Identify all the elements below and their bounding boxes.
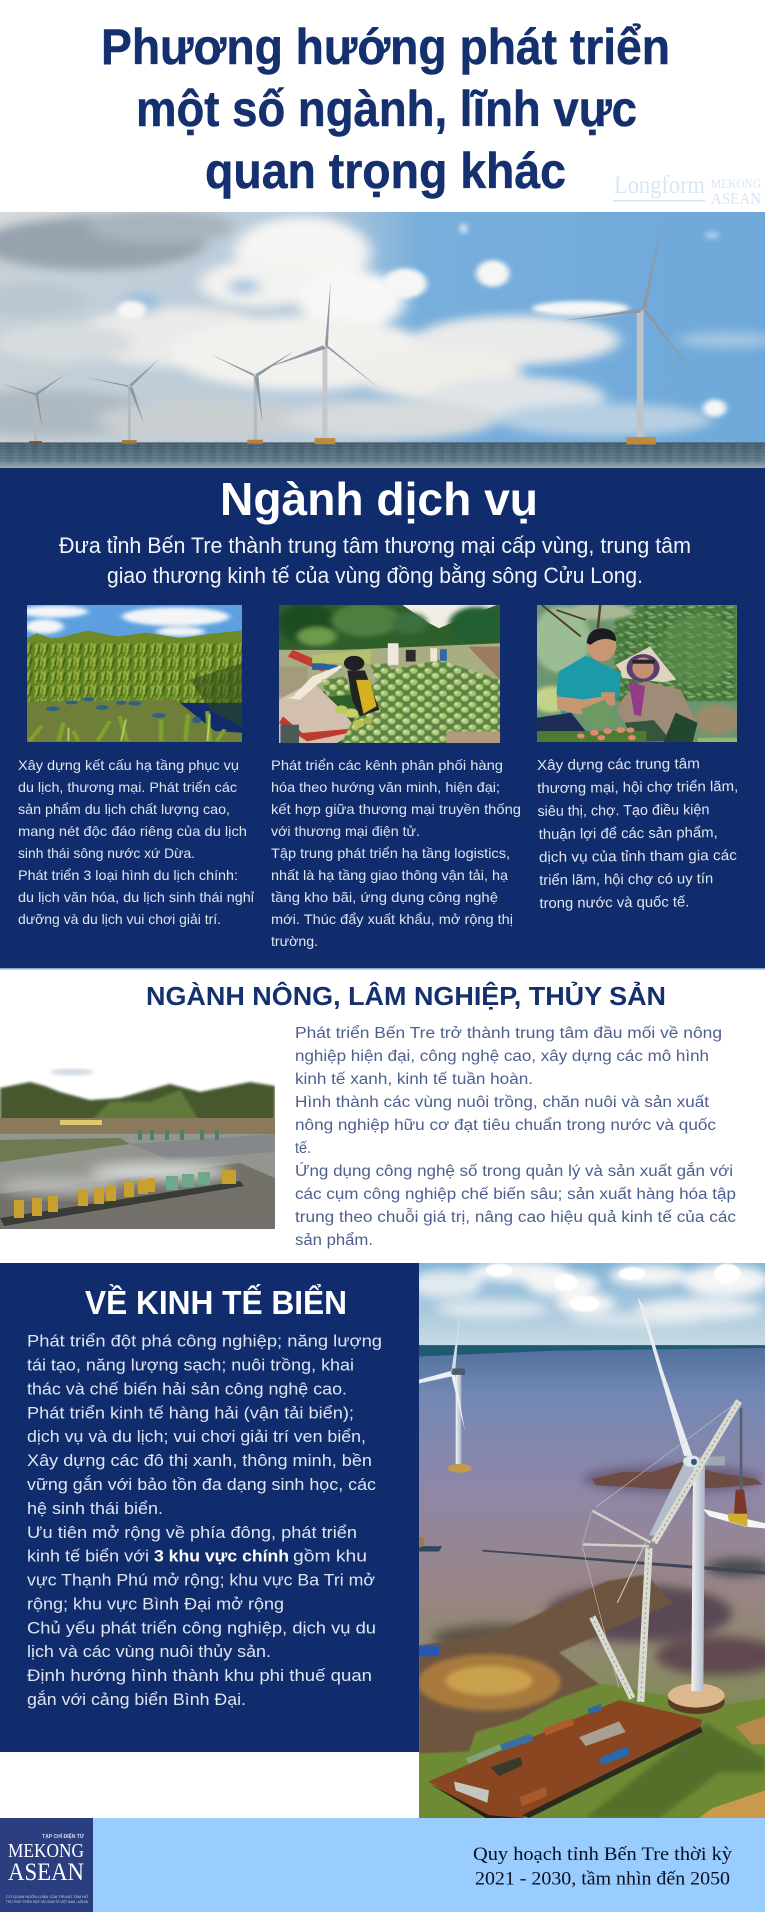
title: quan trọng khác xyxy=(205,143,566,199)
title xyxy=(101,19,670,199)
text: distribution and logistics column xyxy=(271,757,521,949)
text: agriculture description: trung theo chuỗi giá trị, nâng cao hiệu quả kinh tế của các xyxy=(295,1209,736,1226)
text: tourism column: du lịch văn hóa, du lịch sinh thái nghỉ xyxy=(18,889,255,905)
panel: marine economy xyxy=(0,1263,419,1752)
text: trade centres column: Xây dựng các trung tâm xyxy=(537,756,700,774)
text: trade centres column: siêu thị, chợ. Tạo điều kiện xyxy=(537,802,710,820)
photo: wind turbine construction with crane barge xyxy=(419,1263,765,1818)
text: marine economy description: Xây dựng các đô thị xanh, thông minh, bền xyxy=(27,1451,372,1470)
photo: offshore wind turbines xyxy=(0,212,765,468)
subtitle: giao thương kinh tế của vùng đồng bằng sông Cửu Long. xyxy=(107,563,643,588)
text: trade centres column: thương mại, hội chợ triển lãm, xyxy=(537,779,738,797)
text: distribution and logistics column: tầng kho bãi, ứng dụng công nghệ xyxy=(271,889,498,905)
text: marine economy description: thác và chế biến hải sản công nghệ cao. xyxy=(27,1380,347,1398)
text: trade centres column: triển lãm, hội chợ có uy tín xyxy=(539,871,713,889)
text: marine economy description: vực Thạnh Phú mở rộng; khu vực Ba Tri mở xyxy=(27,1570,375,1590)
text: agriculture description: tế. xyxy=(295,1140,311,1157)
text: marine economy description: dịch vụ và du lịch; vui chơi giải trí ven biển, xyxy=(27,1427,366,1446)
text: marine economy description: gắn với cảng biển Bình Đại. xyxy=(27,1690,246,1709)
logo: Mekong ASEAN: TẠP CHÍ ĐIỆN TỬ xyxy=(42,1832,85,1840)
text: trade centres column: thuận lợi để các sản phẩm, xyxy=(539,825,718,843)
watermark: Longform Mekong ASEAN: Longform xyxy=(614,172,705,199)
text: agriculture description xyxy=(295,1025,736,1249)
text: marine economy description: Chủ yếu phát triển công nghiệp, dịch vụ du xyxy=(27,1618,376,1638)
text: marine economy description: 3 khu vực chính xyxy=(154,1546,289,1566)
text: marine economy description: kinh tế biển với xyxy=(27,1546,149,1566)
barge xyxy=(428,1700,702,1818)
text: marine economy description: tái tạo, năng lượng sạch; nuôi trồng, khai xyxy=(27,1356,354,1374)
text: distribution and logistics column: Tập trung phát triển hạ tầng logistics, xyxy=(271,845,510,861)
text: agriculture description: Hình thành các vùng nuôi trồng, chăn nuôi và sản xuất xyxy=(295,1094,710,1111)
text: tourism column: mang nét độc đáo riêng của du lịch xyxy=(18,823,247,839)
large turbine xyxy=(691,1461,705,1691)
footer bar xyxy=(0,1818,765,1912)
footer caption: Quy hoạch tỉnh Bến Tre thời kỳ xyxy=(473,1844,733,1865)
text: tourism column: Xây dựng kết cấu hạ tầng phục vụ xyxy=(18,757,239,773)
watermark: Longform Mekong ASEAN xyxy=(613,172,761,208)
text: trade centres column xyxy=(537,756,739,912)
turbines xyxy=(0,225,700,443)
text: agriculture description: Phát triển Bến Tre trở thành trung tâm đầu mối về nông xyxy=(295,1025,722,1042)
footer caption: 2021 - 2030, tầm nhìn đến 2050 xyxy=(475,1868,730,1890)
logo: Mekong ASEAN: CƠ QUAN NGÔN LUẬN CỦA TRUNG TÂM HỖ xyxy=(6,1894,88,1899)
text: agriculture description: kinh tế xanh, kinh tế tuần hoàn. xyxy=(295,1071,533,1088)
logo: Mekong ASEAN: MEKONG xyxy=(8,1840,84,1862)
footer caption xyxy=(473,1844,733,1890)
text: distribution and logistics column: với thương mại điện tử. xyxy=(271,823,420,839)
text: distribution and logistics column: nhất là hạ tầng giao thông vận tải, hạ xyxy=(271,867,508,883)
divider line under services panel xyxy=(0,968,765,970)
text: tourism column: sinh thái sông nước xứ Dừa. xyxy=(18,845,195,861)
logo: Mekong ASEAN xyxy=(0,1818,93,1912)
foundation xyxy=(668,1690,725,1714)
text: agriculture description: nông nghiệp hữu cơ đạt tiêu chuẩn trong nước và quốc xyxy=(295,1117,716,1134)
photo: farmers with fruit xyxy=(537,605,737,742)
text: agriculture description: nghiệp hiện đại, công nghệ cao, xây dựng các mô hình xyxy=(295,1048,709,1065)
subtitle xyxy=(59,533,691,588)
text: marine economy description xyxy=(27,1332,382,1709)
text: marine economy description: vững gắn với bảo tồn đa dạng sinh học, các xyxy=(27,1475,377,1494)
heading: Ngành dịch vụ: Ngành dịch vụ xyxy=(220,473,538,525)
text: distribution and logistics column: trường. xyxy=(271,933,318,949)
subtitle: Đưa tỉnh Bến Tre thành trung tâm thương mại cấp vùng, trung tâm xyxy=(59,533,691,558)
text: trade centres column: dịch vụ của tỉnh tham gia các xyxy=(539,848,737,866)
text: distribution and logistics column: hóa theo hướng văn minh, hiện đại; xyxy=(271,779,500,795)
text: marine economy description: rộng; khu vực Bình Đại mở rộng xyxy=(27,1594,284,1614)
crane xyxy=(592,1401,739,1702)
text: distribution and logistics column: kết hợp giữa thương mại truyền thống xyxy=(271,801,521,817)
text: trade centres column: trong nước và quốc tế. xyxy=(539,894,689,912)
heading: agriculture: NGÀNH NÔNG, LÂM NGHIỆP, THỦY SẢN xyxy=(146,980,666,1011)
text: agriculture description: các cụm công nghiệp chế biến sâu; sản xuất hàng hóa tập xyxy=(295,1186,736,1203)
text: distribution and logistics column: mới. Thúc đẩy xuất khẩu, mở rộng thị xyxy=(271,911,513,927)
text: marine economy description: Phát triển kinh tế hàng hải (vận tải biển); xyxy=(27,1404,354,1422)
text: marine economy description: Định hướng hình thành khu phi thuế quan xyxy=(27,1666,372,1685)
panel: services xyxy=(0,468,765,969)
text: agriculture description: Ứng dụng công nghệ số trong quản lý và sản xuất gắn với xyxy=(295,1163,733,1180)
text: marine economy description: gồm khu xyxy=(293,1546,367,1566)
text: tourism column: dưỡng và du lịch vui chơi giải trí. xyxy=(18,911,221,927)
heading: Về kinh tế biển: VỀ KINH TẾ BIỂN xyxy=(85,1284,347,1321)
text: tourism column: Phát triển 3 loại hình du lịch chính: xyxy=(18,867,238,883)
photo: coconut palm forest with basket boats xyxy=(27,605,242,742)
photo: coconut market on canal xyxy=(279,605,500,743)
text: marine economy description: Phát triển đột phá công nghiệp; năng lượng xyxy=(27,1332,382,1350)
text: marine economy description: lịch và các vùng nuôi thủy sản. xyxy=(27,1642,271,1661)
text: tourism column xyxy=(18,757,255,927)
text: agriculture description: sản phẩm. xyxy=(295,1232,373,1249)
title: một số ngành, lĩnh vực xyxy=(136,81,637,137)
text: tourism column: sản phẩm du lịch chất lượng cao, xyxy=(18,801,230,817)
title: Phương hướng phát triển xyxy=(101,19,670,75)
small turbine xyxy=(419,1309,472,1473)
photo: shrimp pond with aerators xyxy=(0,1068,275,1229)
logo: Mekong ASEAN: ASEAN xyxy=(8,1859,84,1886)
text: tourism column: du lịch, thương mại. Phát triển các xyxy=(18,779,237,795)
text: distribution and logistics column: Phát triển các kênh phân phối hàng xyxy=(271,757,503,773)
text: marine economy description: hệ sinh thái biển. xyxy=(27,1499,163,1518)
logo: Mekong ASEAN: TRỢ PHÁT TRIỂN HỢP TÁC KINH TẾ VIỆT NAM - ASEAN xyxy=(6,1899,88,1904)
text: marine economy description: Ưu tiên mở rộng về phía đông, phát triển xyxy=(27,1523,357,1542)
